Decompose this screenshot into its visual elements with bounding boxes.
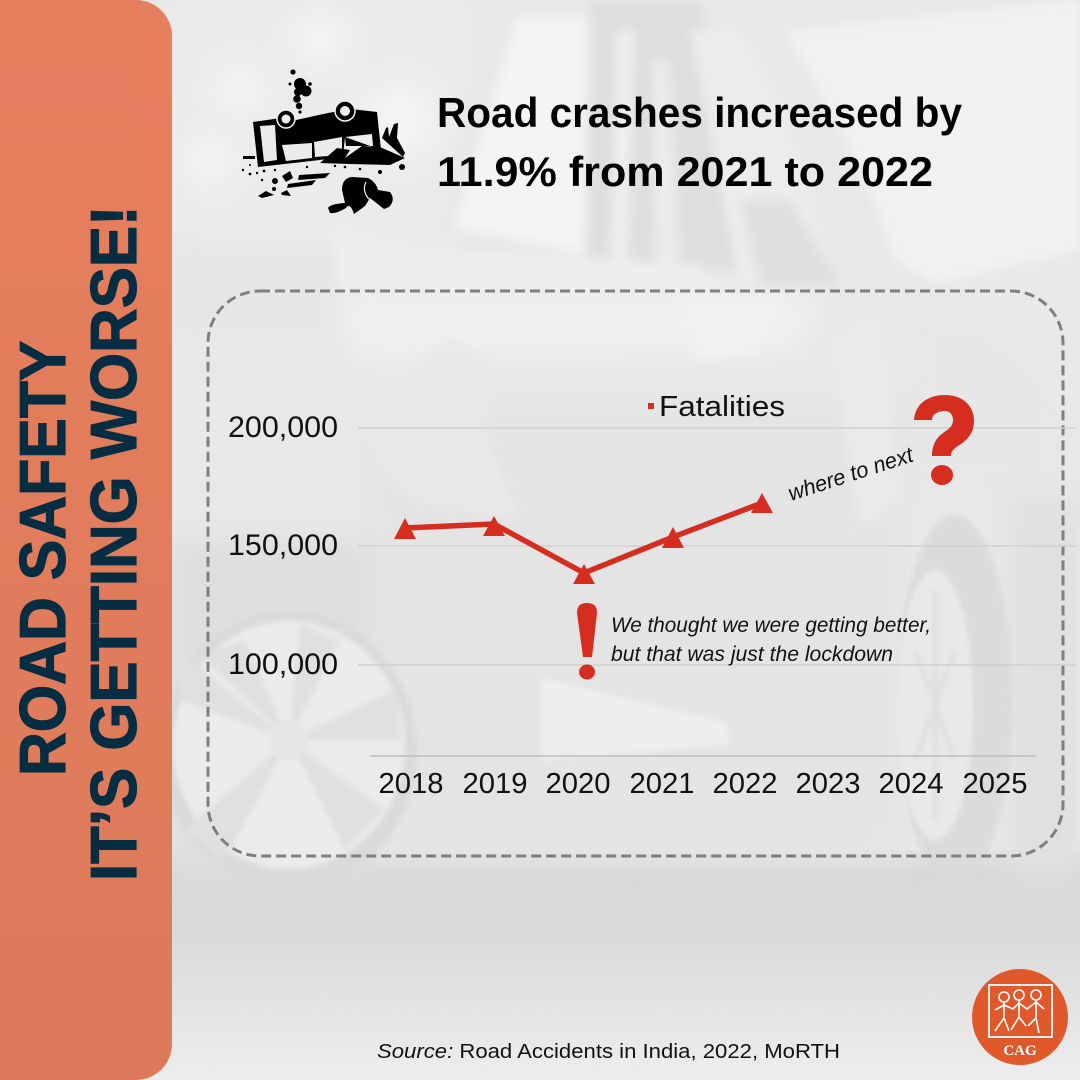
x axis labels: 2023 bbox=[796, 768, 860, 800]
icon: exclamation mark bbox=[577, 603, 597, 680]
annotation: lockdown note bbox=[611, 614, 931, 666]
fender lights bbox=[360, 335, 520, 520]
x axis labels: 2021 bbox=[630, 768, 694, 800]
logo: CAG: CAG bbox=[1003, 1043, 1037, 1059]
icon: overturned vehicle crash bbox=[242, 69, 405, 214]
x axis labels bbox=[378, 768, 1028, 800]
panel: chart frame bbox=[208, 291, 1076, 856]
logo: CAG bbox=[972, 969, 1068, 1065]
hood bbox=[785, 0, 1080, 283]
x axis labels: 2024 bbox=[878, 768, 944, 800]
annotation: lockdown note: We thought we were getting better, bbox=[611, 614, 931, 637]
pillar bbox=[590, 0, 760, 270]
sidebar heading: getting worse: IT’S GETTING WORSE! bbox=[79, 205, 150, 881]
y axis labels: 100,000 bbox=[228, 648, 338, 681]
x axis labels: 2018 bbox=[378, 768, 444, 800]
y axis labels bbox=[228, 411, 338, 681]
y axis labels: 150,000 bbox=[228, 529, 338, 562]
wheel left bbox=[161, 610, 417, 890]
source: Source: Road Accidents in India, 2022, MoRTH bbox=[377, 1041, 840, 1063]
window bbox=[440, 0, 600, 260]
annotation: where to next: where to next bbox=[785, 442, 917, 506]
sidebar heading: road safety: ROAD SAFETY bbox=[7, 341, 79, 776]
x axis labels: 2020 bbox=[546, 768, 610, 800]
x axis labels: 2019 bbox=[462, 768, 528, 800]
legend: fatalities: Fatalities bbox=[659, 391, 785, 423]
title: Road crashes increased by bbox=[437, 89, 963, 136]
y axis labels: 200,000 bbox=[228, 411, 338, 444]
line chart: fatalities bbox=[394, 493, 773, 584]
x axis labels: 2025 bbox=[962, 768, 1028, 800]
door lower bbox=[330, 225, 720, 290]
chart gridlines and axis bbox=[358, 428, 1076, 756]
wheel right bbox=[897, 515, 1013, 885]
x axis labels: 2022 bbox=[712, 768, 778, 800]
title bbox=[437, 89, 963, 195]
panel: sidebar bbox=[0, 0, 172, 1080]
light wedge bbox=[541, 678, 730, 760]
foliage patches bbox=[184, 12, 438, 186]
title: 11.9% from 2021 to 2022 bbox=[437, 148, 933, 195]
windshield bbox=[690, 30, 830, 285]
annotation: lockdown note: but that was just the lockdown bbox=[611, 643, 893, 666]
icon: question mark bbox=[914, 395, 974, 485]
